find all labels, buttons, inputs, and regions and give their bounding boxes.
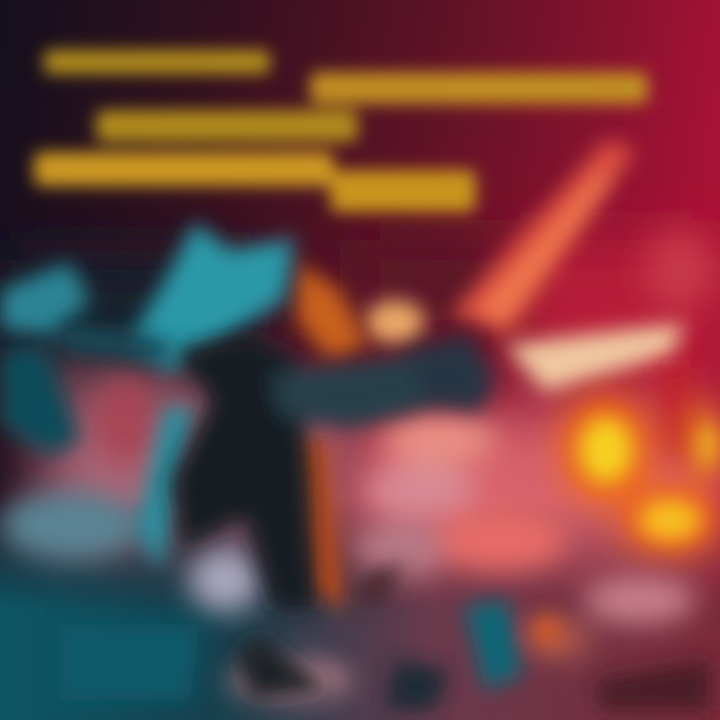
lower background	[0, 500, 720, 720]
glowing streak	[365, 300, 685, 392]
orange shoulder	[290, 262, 368, 610]
fire cores	[580, 418, 716, 540]
lower background haze	[0, 240, 720, 600]
explosions on the right	[365, 230, 720, 554]
warrior figure	[0, 222, 495, 610]
teal armor	[0, 222, 295, 570]
orange light beam	[450, 140, 636, 335]
dark body	[60, 322, 495, 610]
title text, blurred	[34, 50, 648, 212]
pink rubble	[0, 376, 696, 698]
foreground debris	[60, 562, 710, 710]
fire glows	[560, 230, 720, 554]
left figure	[0, 345, 80, 455]
